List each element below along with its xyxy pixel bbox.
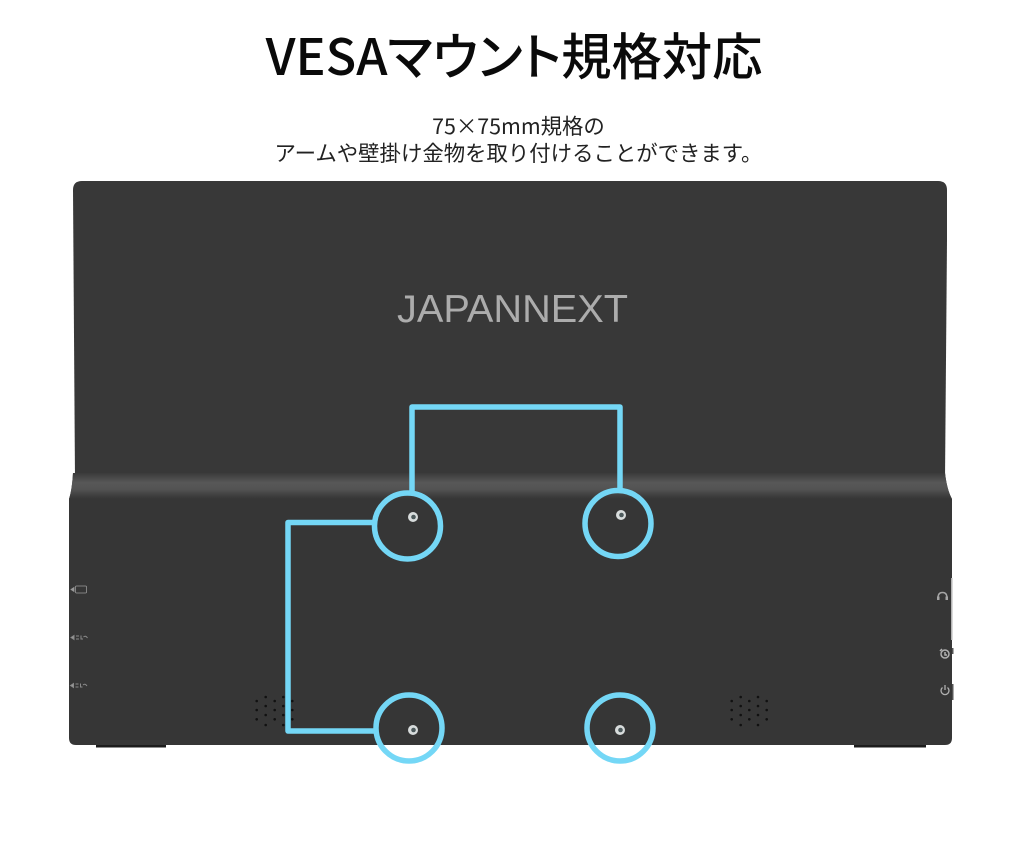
left speaker grille xyxy=(255,696,294,726)
left foot xyxy=(96,745,166,748)
icon: menu dial xyxy=(940,649,949,658)
monitor upper panel xyxy=(73,181,947,480)
circle: top-left mount hole xyxy=(374,493,440,559)
subtitle text block: 75×75mm規格の xyxy=(432,110,605,141)
right speaker grille xyxy=(730,696,768,726)
circle: bottom-right mount hole xyxy=(587,695,653,761)
circle: bottom-left mount hole xyxy=(376,695,442,761)
logo: JAPANNEXT xyxy=(397,288,628,331)
icon: usb port lower xyxy=(70,684,87,688)
left bracket line xyxy=(288,522,375,731)
icon: headphone xyxy=(937,592,948,600)
top bracket line xyxy=(412,407,620,491)
monitor lower body xyxy=(69,473,952,745)
icon: power xyxy=(941,685,949,695)
highlight band xyxy=(69,473,952,499)
icon: usb port upper xyxy=(71,636,88,640)
circle: top-right mount hole xyxy=(585,490,651,556)
subtitle text block: アームや壁掛け金物を取り付けることができます。 xyxy=(275,137,762,168)
right edge buttons xyxy=(951,578,954,700)
right foot xyxy=(854,745,926,748)
subtitle text block xyxy=(275,110,762,168)
icon: display port xyxy=(71,586,86,593)
title: VESAマウント規格対応 xyxy=(266,18,762,90)
